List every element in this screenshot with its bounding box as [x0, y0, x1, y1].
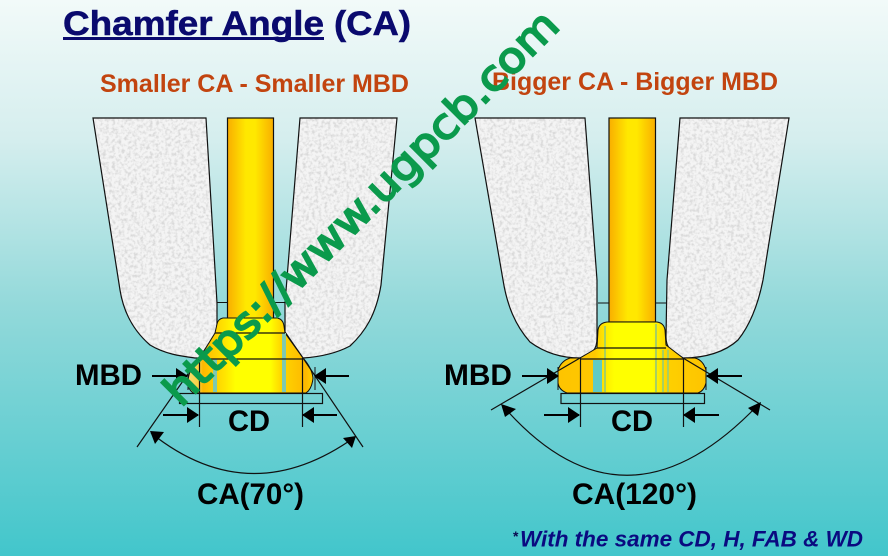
CD guide lines [580, 358, 684, 427]
arrow: CD right [684, 414, 719, 416]
capillary: right wall [285, 118, 397, 358]
title: (CA) [334, 5, 411, 43]
gap lines [598, 302, 666, 304]
MBD ticks [188, 367, 315, 390]
heading: smaller CA: Smaller CA - Smaller MBD [100, 70, 409, 98]
wire [228, 118, 274, 320]
capillary: left wall [93, 118, 217, 358]
heading: bigger CA: Bigger CA - Bigger MBD [492, 68, 778, 96]
arrow: CD left [163, 414, 198, 416]
capillary: right wall [666, 118, 789, 358]
arc arrowhead right [748, 402, 761, 416]
ball section lines [580, 348, 683, 359]
chamfer lines [491, 358, 770, 410]
label: CD: CD [611, 405, 653, 438]
arc arrowhead left [150, 431, 164, 444]
bond pad [561, 394, 704, 404]
free air ball [558, 322, 706, 393]
arrow: MBD right [315, 375, 349, 377]
MBD ticks [558, 367, 706, 390]
diagram: bigger chamfer angle [444, 118, 789, 511]
diagram: smaller chamfer angle [75, 118, 397, 511]
arrow: MBD left [522, 375, 558, 377]
label: CD: CD [228, 405, 270, 438]
label: CA(70°): CA(70°) [197, 478, 304, 511]
ball section lines [199, 333, 303, 359]
gap lines [217, 302, 285, 304]
bond pad [180, 394, 322, 404]
label: CA(120°): CA(120°) [572, 478, 697, 511]
label: MBD: MBD [444, 359, 512, 392]
watermark: https://www.ugpcb.com [153, 0, 568, 415]
capillary: left wall [475, 118, 597, 358]
ball stripes [215, 333, 284, 392]
free air ball [188, 318, 313, 393]
arc: chamfer angle 120 [503, 405, 758, 475]
ball stripes [593, 360, 602, 392]
arc arrowhead left [501, 404, 516, 417]
arrow: CD left [544, 414, 579, 416]
wire [609, 118, 656, 322]
footnote: With the same CD, H, FAB & WD [520, 526, 863, 552]
arc: chamfer angle 70 [151, 433, 355, 474]
arrow: MBD right [707, 375, 742, 377]
footnote: * [513, 528, 519, 544]
arrow: CD right [303, 414, 337, 416]
title [63, 5, 411, 43]
arc arrowhead right [343, 436, 356, 448]
CD guide lines [200, 358, 302, 427]
label: MBD: MBD [75, 359, 142, 392]
title: Chamfer Angle [63, 5, 324, 43]
chamfer lines [137, 358, 363, 447]
arrow: MBD left [152, 375, 187, 377]
